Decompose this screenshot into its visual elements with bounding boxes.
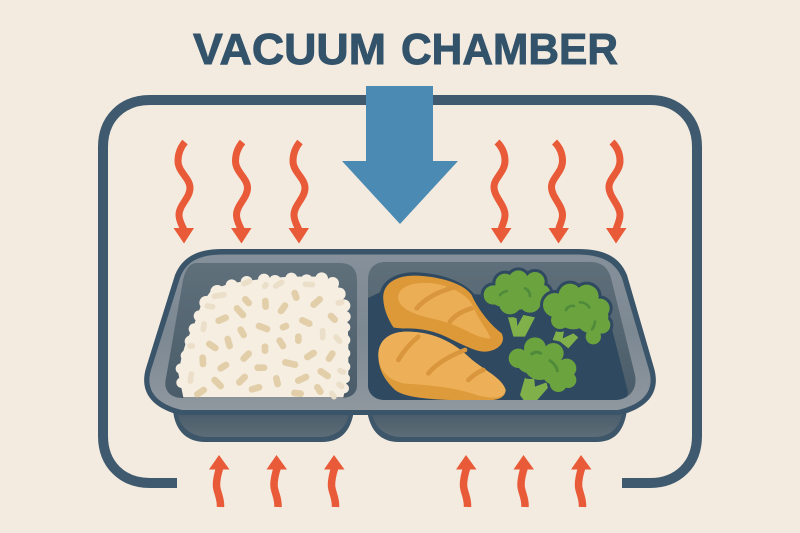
chicken breast: upper bbox=[379, 272, 506, 355]
heat arrows: top left bbox=[174, 142, 309, 244]
title: VACUUM bbox=[193, 25, 386, 74]
heat arrows: bottom left bbox=[209, 455, 344, 507]
vacuum chamber outline bbox=[103, 100, 697, 483]
chicken breast: lower bbox=[375, 328, 509, 403]
heat arrow 2 bbox=[231, 142, 252, 244]
heat arrow 11 bbox=[514, 455, 534, 507]
heat arrow 1 bbox=[174, 142, 194, 244]
heat arrow 4 bbox=[491, 142, 512, 244]
broccoli: bottom bbox=[509, 337, 576, 401]
meal tray bbox=[144, 249, 656, 442]
heat arrow 6 bbox=[606, 142, 626, 244]
tray rim bbox=[144, 249, 656, 415]
heat arrow 7 bbox=[209, 455, 230, 507]
heat arrow 3 bbox=[288, 142, 309, 244]
vacuum arrow bbox=[342, 86, 458, 224]
broccoli: right bbox=[543, 284, 610, 348]
rice grains bbox=[190, 281, 343, 397]
rice bbox=[176, 272, 351, 397]
heat arrow 9 bbox=[324, 455, 344, 507]
left compartment bbox=[165, 263, 357, 398]
heat arrow 12 bbox=[571, 455, 592, 507]
broccoli: top left bbox=[484, 270, 550, 337]
title: CHAMBER bbox=[401, 25, 618, 74]
right compartment bbox=[368, 262, 636, 400]
heat arrows: top right bbox=[491, 142, 626, 244]
heat arrows: bottom right bbox=[456, 455, 592, 507]
rice mound bbox=[176, 272, 351, 397]
heat arrow 10 bbox=[456, 455, 476, 507]
heat arrow 5 bbox=[548, 142, 569, 244]
tray legs bbox=[173, 410, 627, 442]
heat arrow 8 bbox=[266, 455, 287, 507]
food in right compartment bbox=[375, 270, 610, 403]
